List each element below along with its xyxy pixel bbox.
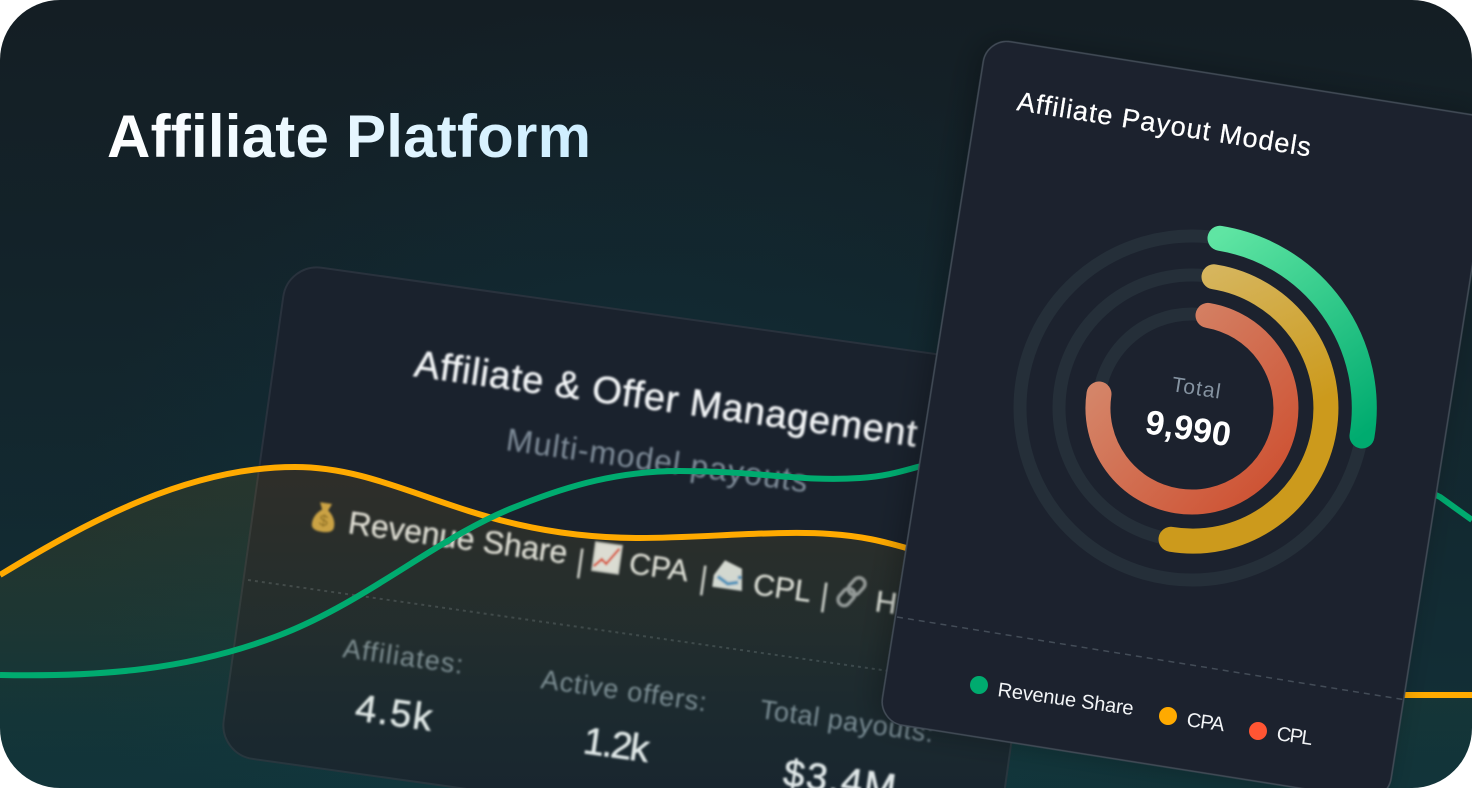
panel: affiliate payout models bbox=[879, 38, 1472, 788]
arc: CPL bbox=[1098, 315, 1286, 502]
radial bar chart bbox=[1020, 236, 1364, 580]
separator: | bbox=[818, 576, 831, 613]
legend label: revenue share: Revenue Share bbox=[996, 679, 1135, 720]
total value: 9,990 bbox=[1143, 403, 1234, 454]
area under orange curve bbox=[0, 470, 904, 762]
card heading: Affiliate & Offer Management bbox=[412, 343, 920, 456]
separator: | bbox=[697, 559, 710, 596]
panel heading: Affiliate Payout Models bbox=[1015, 86, 1313, 162]
legend dot: CPL bbox=[1249, 722, 1267, 740]
icon: link bbox=[836, 575, 867, 608]
legend dot: CPA bbox=[1159, 707, 1177, 725]
card subtitle: Multi-model payouts bbox=[504, 421, 810, 499]
metric: active offers label: Active offers: bbox=[539, 664, 709, 717]
icon: chart bbox=[591, 541, 623, 575]
payout model: hybrid: H bbox=[873, 585, 899, 621]
icon: money bag bbox=[311, 502, 337, 533]
panel: affiliate and offer management bbox=[219, 263, 1063, 788]
payout model: CPA: CPA bbox=[627, 547, 691, 588]
total label: Total bbox=[1170, 373, 1222, 404]
metric: affiliates label: Affiliates: bbox=[341, 633, 465, 680]
arc: revenue share bbox=[1220, 238, 1364, 436]
metric: affiliates value: 4.5k bbox=[353, 687, 436, 740]
payout model: revenue share: Revenue Share bbox=[346, 504, 570, 571]
payout model: CPL: CPL bbox=[751, 568, 813, 609]
metric: total payouts label: Total payouts: bbox=[758, 694, 936, 748]
legend label: CPA: CPA bbox=[1185, 709, 1227, 736]
legend dot: revenue share bbox=[970, 676, 988, 694]
title: Affiliate Platform bbox=[107, 103, 591, 170]
icon: money bag: $ bbox=[318, 512, 329, 531]
green line bbox=[0, 440, 1472, 675]
orange line bbox=[0, 467, 1472, 695]
separator: | bbox=[574, 542, 587, 579]
arc: CPA bbox=[1171, 277, 1326, 541]
legend label: CPL: CPL bbox=[1275, 723, 1314, 750]
metric: active offers value: 1.2k bbox=[581, 720, 653, 771]
icon: envelope bbox=[712, 559, 746, 591]
legend bbox=[970, 676, 1314, 750]
